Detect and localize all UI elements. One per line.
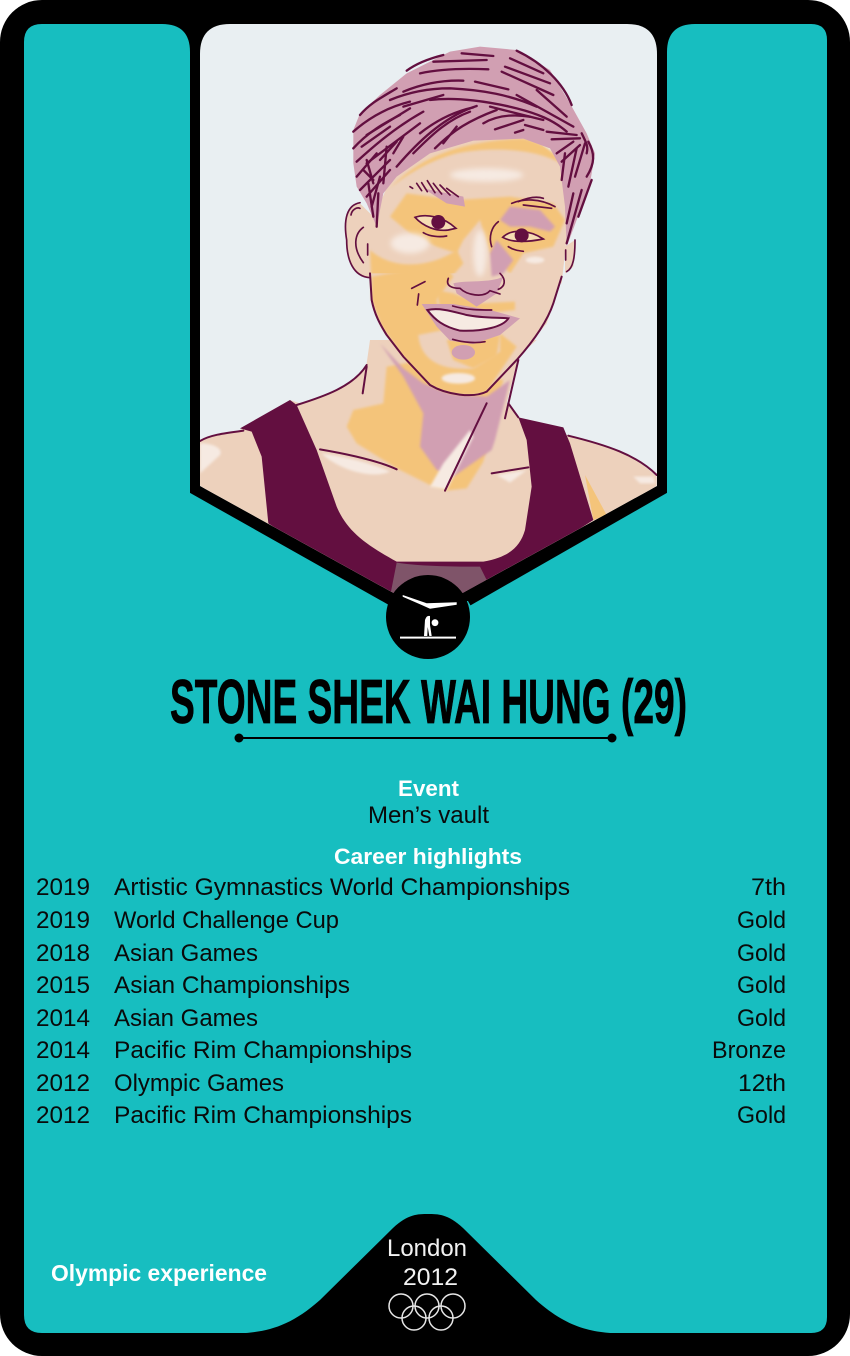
eyebrows xyxy=(410,181,555,208)
icon: olympic rings xyxy=(389,1294,465,1330)
row 2014 asian games: Asian Games xyxy=(114,1005,258,1032)
event block xyxy=(368,776,489,829)
row 2019 world championships: 7th xyxy=(751,874,786,901)
host city and year: London xyxy=(387,1235,467,1262)
portrait illustration xyxy=(200,24,657,640)
row 2015 asian championships: Gold xyxy=(737,972,786,999)
row 2019 world challenge cup: World Challenge Cup xyxy=(114,907,339,934)
row 2012 pacific rim xyxy=(36,1102,786,1129)
portrait side borders xyxy=(195,24,662,601)
row 2019 world championships: Artistic Gymnastics World Championships xyxy=(114,874,570,901)
olympic experience label: Olympic experience xyxy=(51,1260,267,1286)
row 2018 asian games: 2018 xyxy=(36,940,90,967)
bottom hump xyxy=(225,1214,630,1334)
row 2019 world championships xyxy=(36,874,786,901)
row 2012 olympic games: 2012 xyxy=(36,1070,90,1097)
row 2019 world challenge cup: 2019 xyxy=(36,907,90,934)
row 2018 asian games: Asian Games xyxy=(114,940,258,967)
row 2014 asian games: Gold xyxy=(737,1005,786,1032)
row 2014 asian games xyxy=(36,1005,786,1032)
row 2018 asian games: Gold xyxy=(737,940,786,967)
lower face and jaw xyxy=(370,263,562,395)
row 2014 pacific rim: 2014 xyxy=(36,1037,90,1064)
row 2019 world championships: 2019 xyxy=(36,874,90,901)
icon: gymnast on vault xyxy=(386,575,470,659)
career highlights heading: Career highlights xyxy=(334,844,522,869)
row 2015 asian championships: Asian Championships xyxy=(114,972,350,999)
row 2015 asian championships xyxy=(36,972,786,999)
event block: Men’s vault xyxy=(368,802,489,829)
black shield border lower fill xyxy=(190,470,667,601)
career highlights table xyxy=(36,874,786,1129)
title underline xyxy=(234,734,616,742)
body and neck xyxy=(200,340,657,593)
row 2012 pacific rim: Pacific Rim Championships xyxy=(114,1102,412,1129)
row 2018 asian games xyxy=(36,940,786,967)
host city and year xyxy=(387,1235,467,1291)
hair xyxy=(353,47,595,247)
row 2014 asian games: 2014 xyxy=(36,1005,90,1032)
row 2019 world challenge cup xyxy=(36,907,786,934)
row 2012 olympic games xyxy=(36,1070,786,1097)
row 2012 olympic games: 12th xyxy=(738,1070,786,1097)
row 2015 asian championships: 2015 xyxy=(36,972,90,999)
row 2012 pacific rim: Gold xyxy=(737,1102,786,1129)
row 2012 pacific rim: 2012 xyxy=(36,1102,90,1129)
row 2019 world challenge cup: Gold xyxy=(737,907,786,934)
row 2012 olympic games: Olympic Games xyxy=(114,1070,284,1097)
eyes xyxy=(415,215,543,242)
face xyxy=(345,47,595,395)
host city and year: 2012 xyxy=(403,1264,458,1291)
face lines xyxy=(345,203,575,305)
row 2014 pacific rim xyxy=(36,1037,786,1064)
event block: Event xyxy=(398,776,460,801)
row 2014 pacific rim: Bronze xyxy=(712,1037,786,1064)
row 2014 pacific rim: Pacific Rim Championships xyxy=(114,1037,412,1064)
